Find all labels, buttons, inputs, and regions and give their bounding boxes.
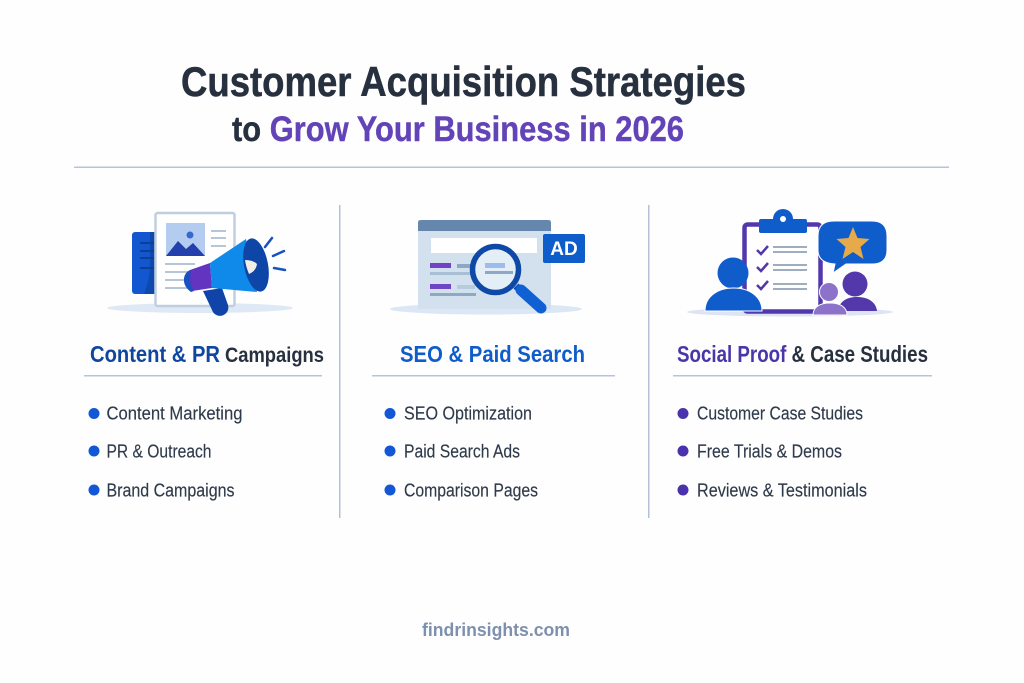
title: to Grow Your Business in 2026	[232, 110, 684, 149]
icon: clipboard, reviewers and star	[687, 209, 893, 316]
list: SEO bullets	[384, 404, 538, 500]
list: social proof bullets: Reviews & Testimonials	[697, 480, 867, 500]
heading: SEO and paid search: SEO & Paid Search	[400, 341, 585, 367]
panel: SEO and paid search	[372, 341, 615, 500]
panel: social proof	[673, 341, 932, 500]
list: content bullets: Brand Campaigns	[106, 480, 234, 500]
heading: social proof and case studies: Social Proof & Case Studies	[677, 341, 928, 367]
list: social proof bullets	[678, 404, 867, 500]
list: social proof bullets: Free Trials & Demos	[697, 442, 842, 462]
icon: search results and ad	[390, 220, 585, 314]
list: content bullets: PR & Outreach	[106, 442, 212, 462]
heading: content and PR campaigns: Campaigns	[225, 344, 324, 367]
heading: content and PR campaigns: Content & PR	[90, 341, 220, 367]
list: social proof bullets: Customer Case Studies	[697, 404, 863, 424]
title	[181, 58, 746, 149]
list: SEO bullets: Paid Search Ads	[404, 442, 520, 462]
icon: newspaper and megaphone	[107, 213, 293, 316]
footer: website: findrinsights.com	[422, 620, 570, 640]
heading: content and PR campaigns	[90, 341, 324, 367]
title: Customer Acquisition Strategies	[181, 58, 746, 105]
list: content bullets	[88, 404, 242, 500]
icon: search results and ad: AD	[550, 239, 578, 260]
panel: content and PR	[84, 341, 324, 500]
list: content bullets: Content Marketing	[106, 404, 242, 424]
list: SEO bullets: Comparison Pages	[404, 480, 538, 500]
list: SEO bullets: SEO Optimization	[404, 404, 532, 424]
